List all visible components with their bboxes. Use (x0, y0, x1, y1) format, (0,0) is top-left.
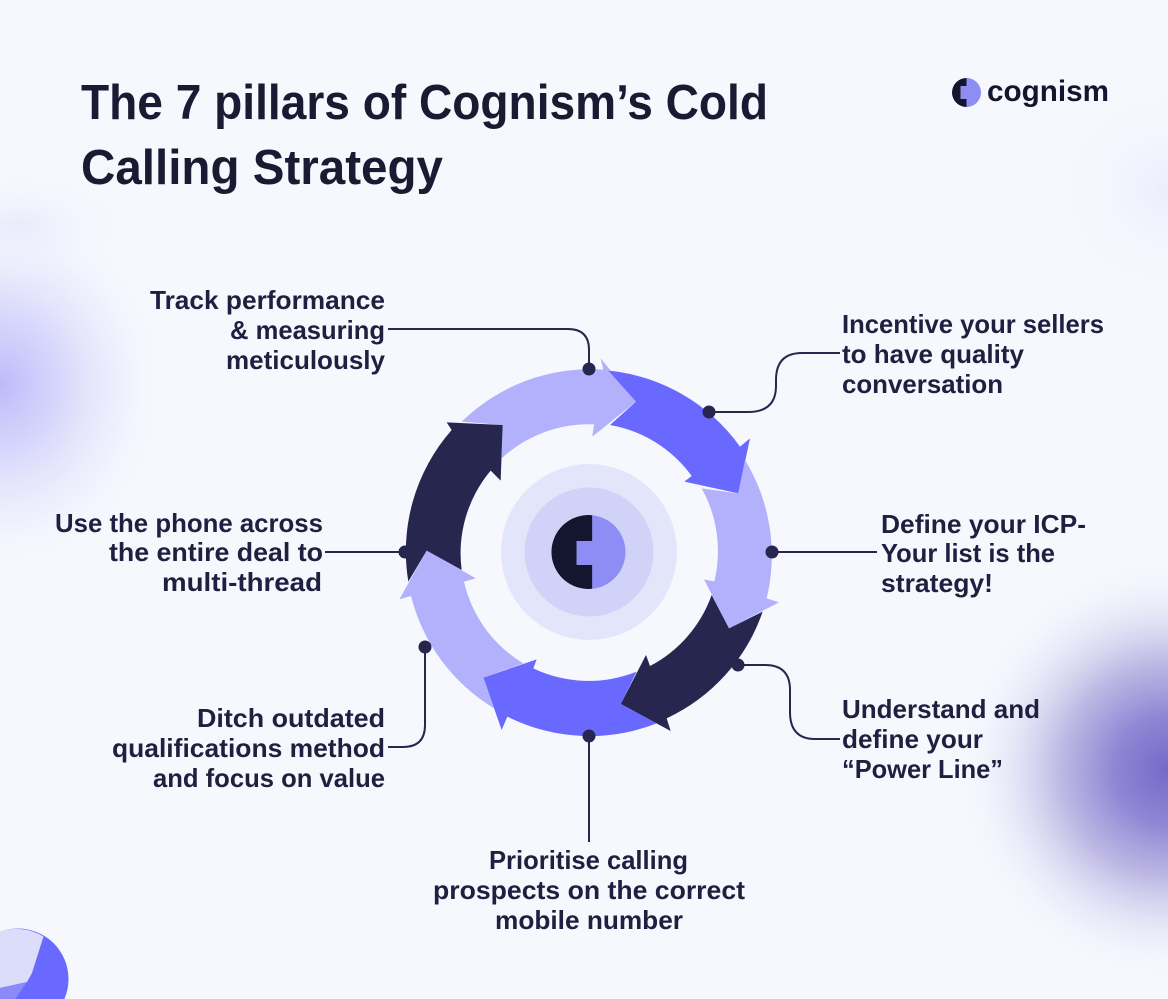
label: define ICP: Define your ICP- (881, 509, 1086, 539)
connector: power line (732, 658, 840, 739)
cycle diagram: seven arrows ring (399, 358, 779, 736)
connector: use the phone (325, 546, 412, 558)
logo: cognism: cognism (987, 75, 1109, 108)
label: prioritise calling (433, 845, 745, 935)
label: incentive sellers: Incentive your sellers (842, 309, 1104, 339)
arrow: blue top right (608, 371, 750, 493)
label: ditch qualifications: Ditch outdated (197, 703, 385, 733)
connector: track performance (388, 329, 596, 376)
connector: define ICP (766, 546, 877, 558)
icon: decorative pie bottom-left (0, 928, 68, 999)
label: power line: “Power Line” (842, 754, 1003, 784)
label: use the phone (55, 508, 323, 597)
connector: prioritise calling (582, 730, 596, 842)
label: prioritise calling: mobile number (495, 905, 683, 935)
label: incentive sellers (842, 309, 1104, 399)
arrow: light right (702, 460, 779, 628)
label: power line: define your (842, 724, 983, 754)
connector: ditch qualifications (388, 640, 432, 747)
arrow: navy bottom right (621, 595, 763, 731)
arrow: blue bottom (483, 659, 657, 736)
label: power line (842, 694, 1040, 784)
label: use the phone: Use the phone across (55, 508, 323, 538)
arrow: light top (462, 358, 636, 458)
label: define ICP (881, 509, 1086, 598)
title: Calling Strategy (81, 141, 443, 195)
label: track performance: Track performance (150, 285, 385, 315)
label: incentive sellers: to have quality (842, 339, 1025, 369)
label: prioritise calling: prospects on the correct (433, 875, 745, 905)
arrow: navy left (406, 422, 503, 582)
label: ditch qualifications: and focus on value (153, 763, 385, 793)
label: incentive sellers: conversation (842, 369, 1003, 399)
title (81, 76, 768, 195)
label: ditch qualifications: qualifications method (112, 733, 385, 763)
label: prioritise calling: Prioritise calling (489, 845, 688, 875)
label: define ICP: strategy! (881, 568, 993, 598)
label: define ICP: Your list is the (881, 538, 1055, 568)
label: ditch qualifications (112, 703, 385, 793)
label: track performance: meticulously (226, 345, 386, 375)
label: track performance (150, 285, 386, 375)
label: use the phone: multi-thread (162, 567, 322, 597)
center target with logo mark (501, 464, 677, 640)
connector: incentive sellers (702, 353, 840, 418)
label: use the phone: the entire deal to (109, 537, 323, 567)
title: The 7 pillars of Cognism’s Cold (81, 76, 768, 130)
label: track performance: & measuring (230, 315, 385, 345)
arrow: light left (399, 551, 523, 708)
label: power line: Understand and (842, 694, 1040, 724)
